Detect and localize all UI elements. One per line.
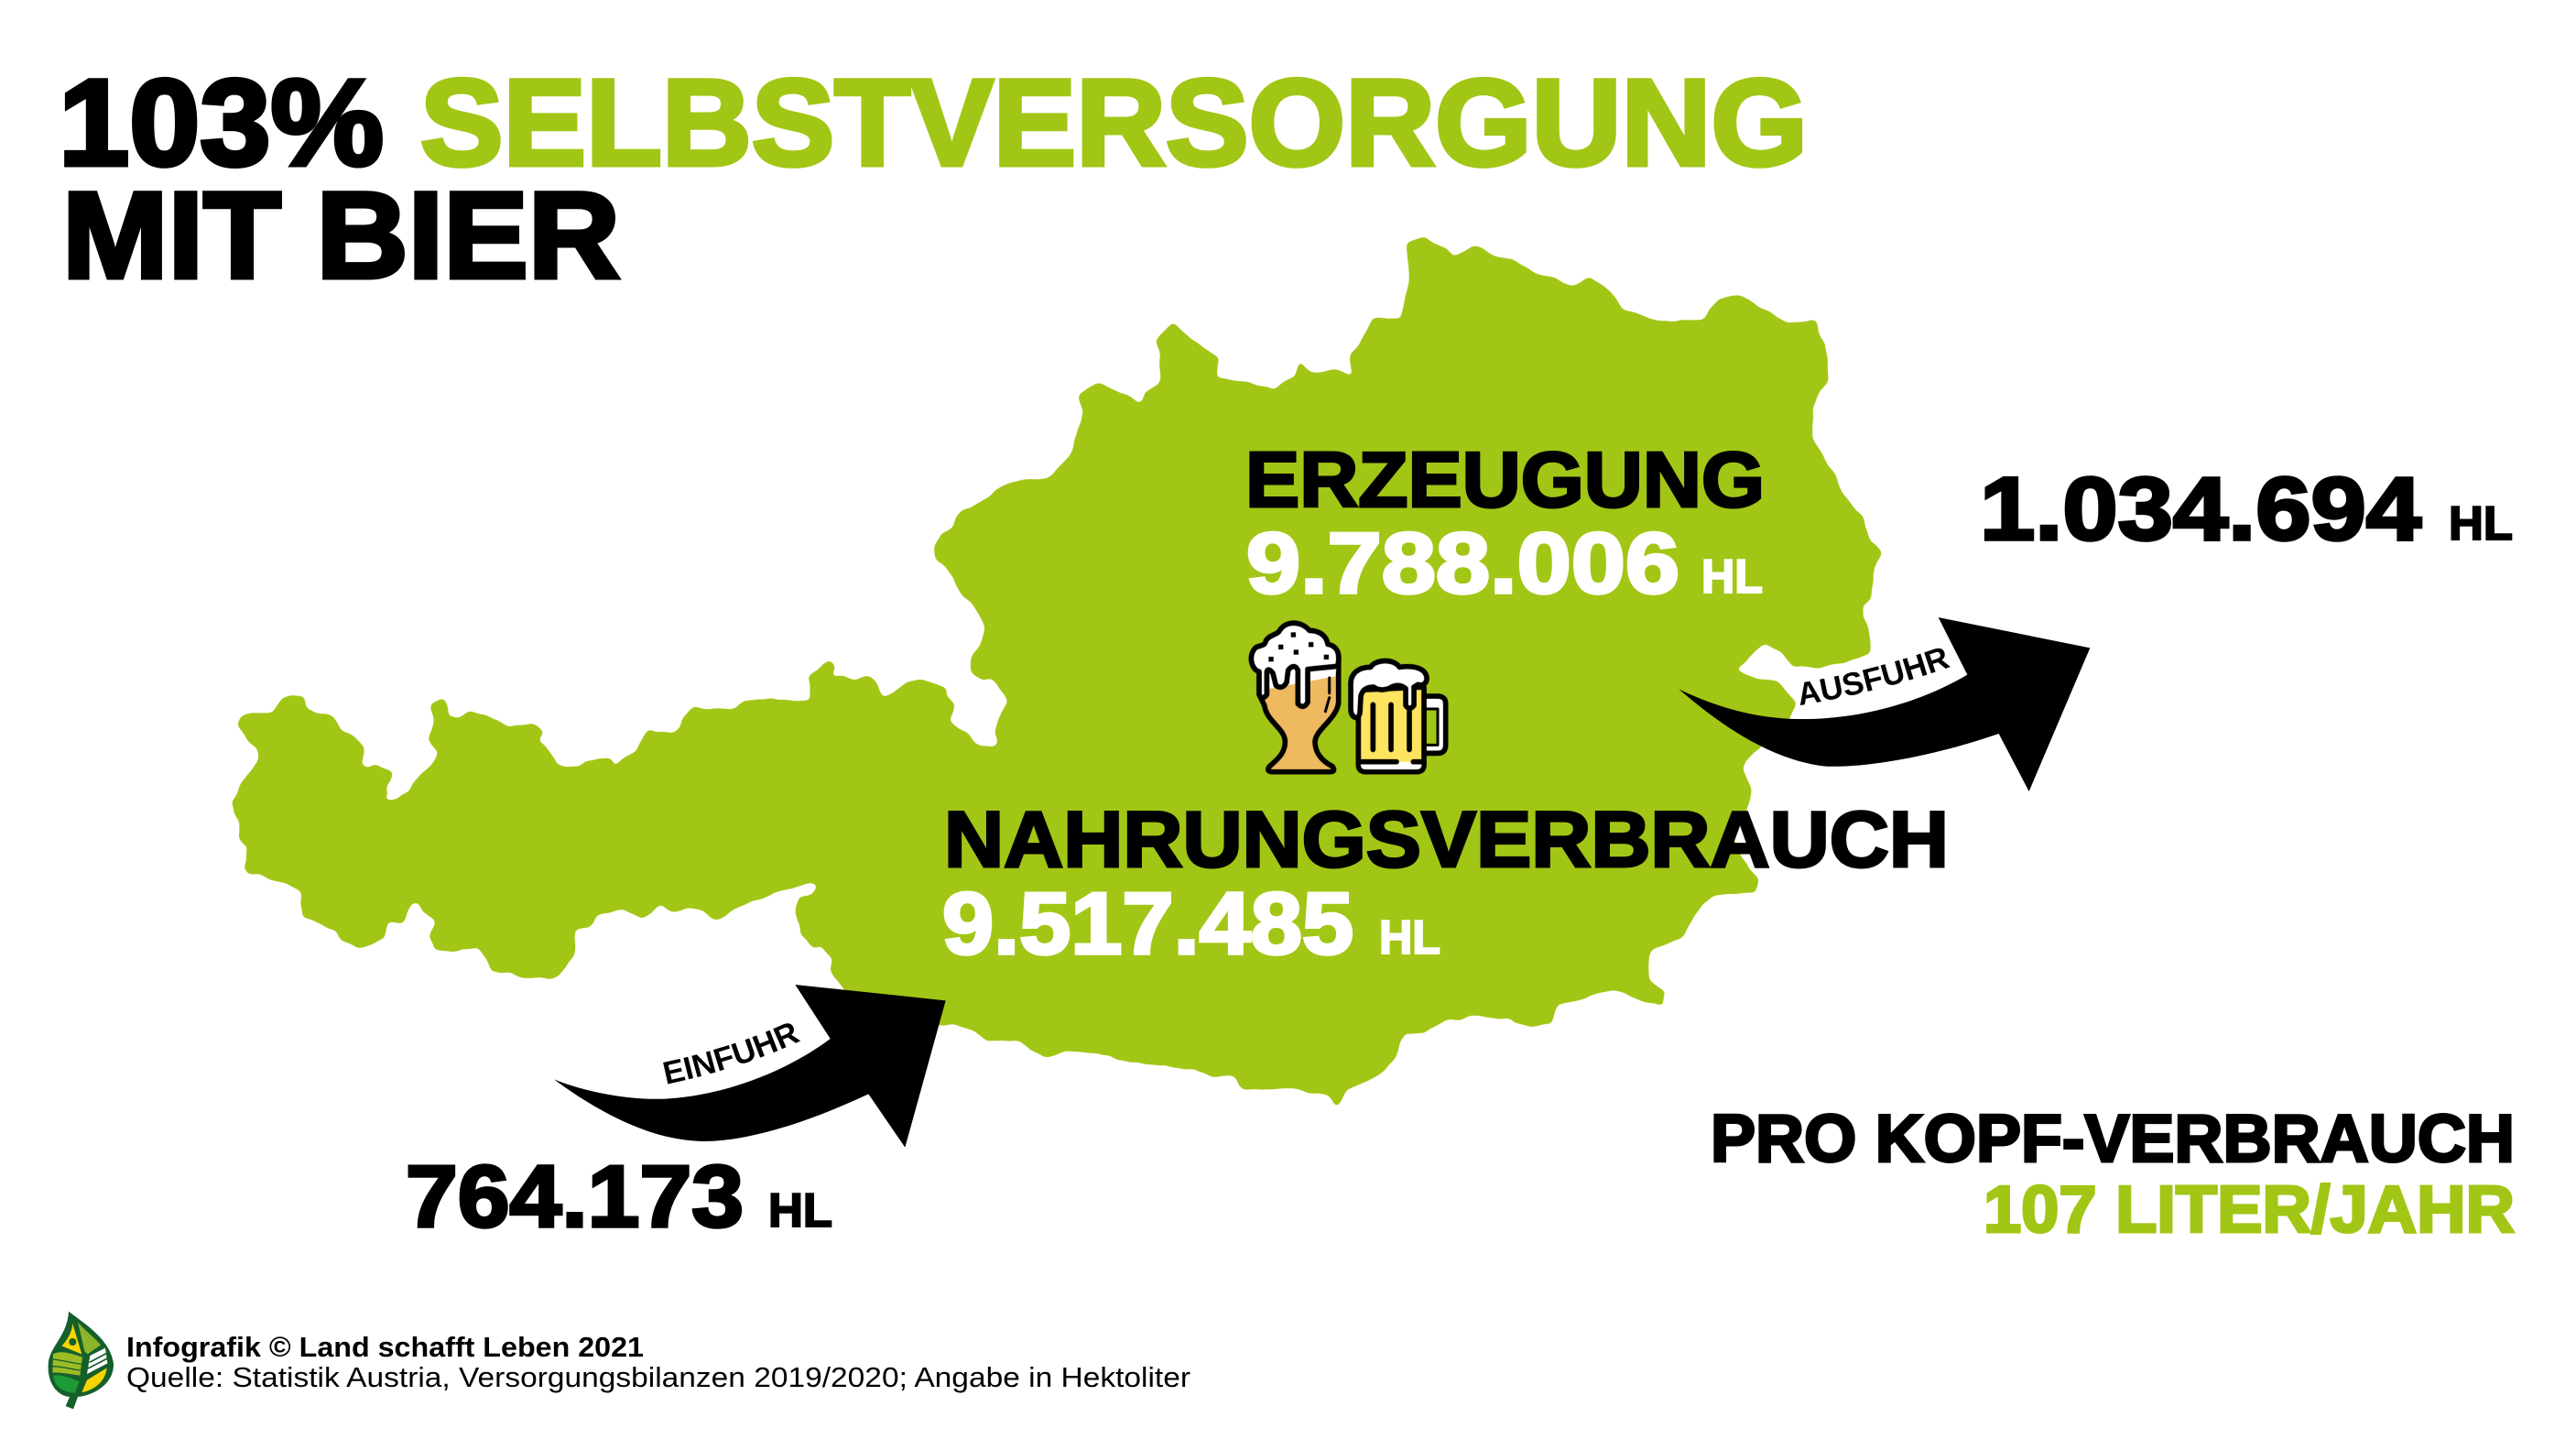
credit and source: Quelle: Statistik Austria, Versorgungsbilanzen 2019/2020; Angabe in Hektoliter <box>126 1361 1190 1393</box>
map of Austria <box>232 237 1883 1107</box>
import value: 764.173 <box>406 1148 744 1246</box>
arrow: Einfuhr <box>554 985 946 1147</box>
icon: beer goblet <box>1251 623 1339 772</box>
per capita consumption: 107 LITER/JAHR <box>1984 1173 2515 1247</box>
Erzeugung block <box>1245 437 1765 611</box>
title <box>59 55 1808 304</box>
Nahrungsverbrauch block <box>942 796 1949 973</box>
per capita consumption <box>1711 1102 2515 1247</box>
export value: HL <box>2449 497 2513 551</box>
Erzeugung block: 9.788.006 <box>1246 515 1679 611</box>
arrow: Einfuhr: EINFUHR <box>663 1023 800 1085</box>
Nahrungsverbrauch block: HL <box>1379 911 1440 965</box>
arrow: Ausfuhr: AUSFUHR <box>1800 649 1951 705</box>
import value: HL <box>768 1184 832 1237</box>
icon: beer glass and mug <box>1251 623 1446 772</box>
icon: beer mug <box>1351 660 1446 772</box>
title: SELBSTVERSORGUNG <box>420 55 1808 191</box>
credit and source: Infografik © Land schafft Leben 2021 <box>126 1331 644 1363</box>
Erzeugung block: ERZEUGUNG <box>1245 437 1765 524</box>
arrow: Ausfuhr <box>1679 617 2090 791</box>
Erzeugung block: HL <box>1701 551 1763 604</box>
title: MIT BIER <box>62 168 620 304</box>
per capita consumption: PRO KOPF-VERBRAUCH <box>1711 1102 2515 1176</box>
title: 103% <box>59 55 384 191</box>
credit and source <box>126 1331 1190 1393</box>
export value: 1.034.694 <box>1980 459 2421 559</box>
Nahrungsverbrauch block: NAHRUNGSVERBRAUCH <box>944 796 1949 884</box>
icon: Land schafft Leben leaf logo <box>49 1312 114 1409</box>
Nahrungsverbrauch block: 9.517.485 <box>942 875 1353 973</box>
